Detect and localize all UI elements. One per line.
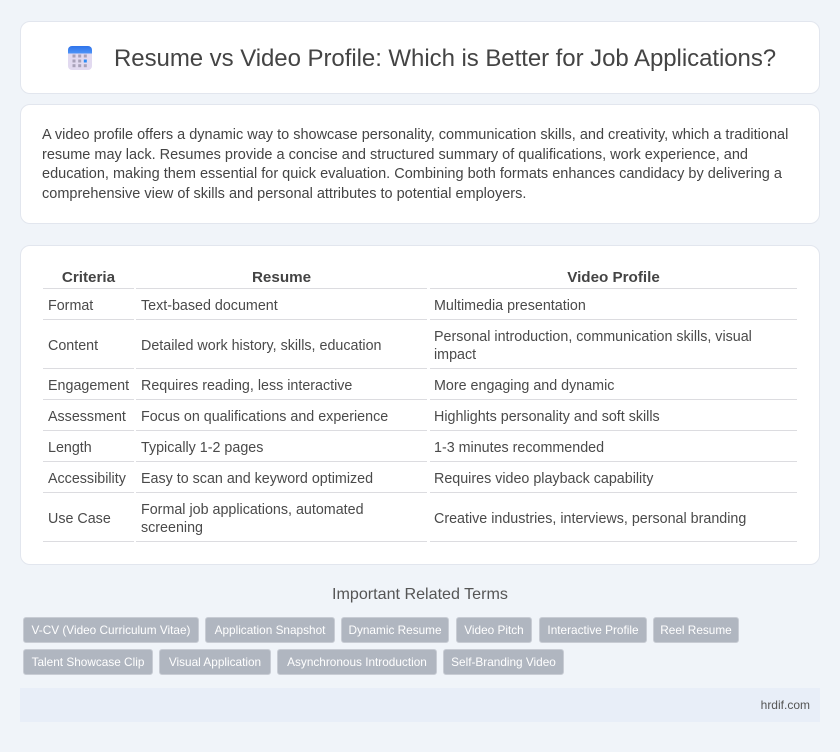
- row: Accessibility: Easy to scan and keyword optimized: [141, 471, 373, 487]
- table header: Video Profile: Video Profile: [567, 269, 660, 286]
- tag: Talent Showcase Clip: [32, 655, 144, 669]
- intro paragraph: comprehensive view of skills and personal attributes to potential employers.: [42, 186, 526, 202]
- row: Assessment: Highlights personality and soft skills: [434, 409, 660, 425]
- panel: intro text: [20, 104, 820, 224]
- row: Length: Length: [48, 440, 92, 456]
- row: Engagement: [48, 378, 614, 394]
- row: Engagement: Engagement: [48, 378, 129, 394]
- row: Format: [48, 298, 586, 314]
- row: Assessment: [48, 409, 660, 425]
- row: Assessment: Focus on qualifications and experience: [141, 409, 388, 425]
- intro paragraph: [42, 127, 788, 202]
- tag: V-CV (Video Curriculum Vitae): [32, 623, 190, 637]
- row: Use Case: Creative industries, interviews, personal branding: [434, 511, 746, 527]
- row: Accessibility: Accessibility: [48, 471, 126, 487]
- row: Engagement: More engaging and dynamic: [434, 378, 614, 394]
- tag: [539, 617, 647, 643]
- tag: Asynchronous Introduction: [287, 655, 427, 669]
- tag: [23, 617, 199, 643]
- row: Use Case: screening: [141, 520, 203, 536]
- related term tags: [23, 617, 739, 675]
- row: Use Case: Use Case: [48, 511, 111, 527]
- footer: [20, 688, 820, 722]
- tag: [159, 649, 271, 675]
- tag: Reel Resume: [660, 623, 732, 637]
- row: Content: impact: [434, 347, 476, 363]
- tag: Video Pitch: [464, 623, 524, 637]
- intro paragraph: education, making them essential for quick evaluation. Combining both formats enhances candidacy by delivering a: [42, 166, 782, 182]
- row: Use Case: Formal job applications, automated: [141, 502, 364, 518]
- row: Accessibility: [48, 471, 654, 487]
- row: Length: 1-3 minutes recommended: [434, 440, 604, 456]
- tag: [23, 649, 153, 675]
- row: Content: Personal introduction, communication skills, visual: [434, 329, 752, 345]
- intro paragraph: A video profile offers a dynamic way to showcase personality, communication skills, and creativity, which a traditional: [42, 127, 788, 143]
- footer source: hrdif.com: [761, 698, 810, 712]
- icon: calendar: [68, 46, 92, 70]
- tag: [277, 649, 437, 675]
- row: Content: Content: [48, 338, 98, 354]
- tag: [205, 617, 335, 643]
- tag: [456, 617, 532, 643]
- tag: Interactive Profile: [547, 623, 639, 637]
- heading: related terms: Important Related Terms: [332, 585, 508, 603]
- row: Content: [48, 329, 752, 363]
- row: Length: Typically 1-2 pages: [141, 440, 263, 456]
- tag: Dynamic Resume: [348, 623, 442, 637]
- row: Content: Detailed work history, skills, education: [141, 338, 382, 354]
- panel: comparison table: [20, 245, 820, 565]
- row: Format: Text-based document: [141, 298, 278, 314]
- title: Resume vs Video Profile: Which is Better for Job Applications?: [114, 45, 776, 72]
- row: Accessibility: Requires video playback capability: [434, 471, 653, 487]
- tag: Visual Application: [169, 655, 261, 669]
- tag: [443, 649, 564, 675]
- title card: [20, 21, 820, 94]
- intro paragraph: resume may lack. Resumes provide a concise and structured summary of qualifications, work experience, and: [42, 146, 748, 162]
- tag: [341, 617, 449, 643]
- tag: [653, 617, 739, 643]
- row: Format: Format: [48, 298, 93, 314]
- table header: Resume: Resume: [252, 269, 311, 286]
- row: Format: Multimedia presentation: [434, 298, 586, 314]
- row: Engagement: Requires reading, less interactive: [141, 378, 352, 394]
- tag: Application Snapshot: [215, 623, 325, 637]
- table header: Criteria: Criteria: [62, 269, 115, 286]
- row: Length: [48, 440, 604, 456]
- tag: Self-Branding Video: [451, 655, 556, 669]
- row: Assessment: Assessment: [48, 409, 126, 425]
- row: Use Case: [48, 502, 746, 536]
- comparison table: [43, 269, 797, 542]
